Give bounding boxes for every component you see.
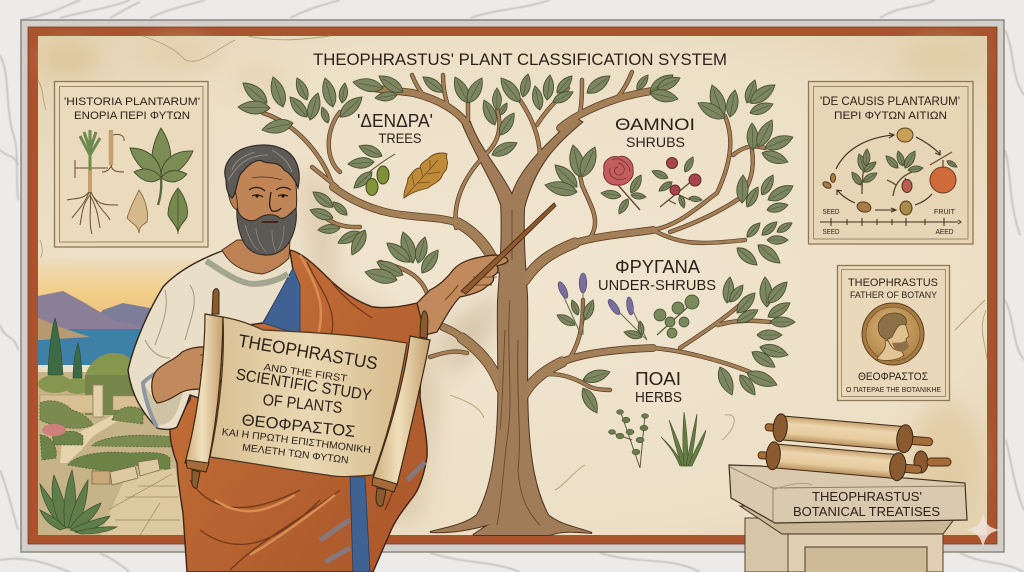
scroll text: SCIENTIFIC STUDY <box>235 366 373 405</box>
icon: rooted plant <box>67 130 124 234</box>
cloak folds and highlights <box>190 255 415 570</box>
beard <box>237 208 296 255</box>
label: under-shrubs <box>598 257 716 294</box>
label: shrubs: ΘΑΜΝΟΙ <box>615 115 695 134</box>
head <box>225 145 299 255</box>
label: trees <box>357 111 433 146</box>
caption <box>848 277 938 300</box>
left roller <box>185 289 223 488</box>
pedestal column <box>745 518 943 572</box>
caption: THEOPHRASTUS <box>848 277 938 289</box>
garden stones <box>92 459 160 485</box>
icon: grass tuft <box>661 412 706 466</box>
icon: oak leaf <box>404 153 448 198</box>
cloak borders <box>320 462 425 562</box>
label: trees: 'ΔΕΝΔΡΑ' <box>357 111 433 131</box>
icon: parsley leaf <box>654 295 699 338</box>
caption: FATHER OF BOTANY <box>850 290 937 300</box>
label: trees: TREES <box>378 130 422 146</box>
label: shrubs <box>615 115 695 150</box>
pedestal label: BOTANICAL TREATISES <box>793 504 940 519</box>
pedestal label: THEOPHRASTUS' <box>812 489 922 504</box>
scroll text: ΚΑΙ Η ΠΡΩΤΗ ΕΠΙΣΤΗΜΟΝΙΚΗ <box>221 427 371 456</box>
blue sash <box>263 268 370 572</box>
panel: Historia Plantarum <box>54 82 208 247</box>
timeline: SEED <box>822 227 840 236</box>
pointer rod <box>461 203 556 294</box>
panel title <box>820 96 960 122</box>
collar <box>206 261 288 284</box>
leaves <box>238 70 796 416</box>
sleeve fold lines <box>145 285 194 358</box>
pedestal with treatises <box>729 413 967 572</box>
forearm and left hand <box>152 347 224 403</box>
label: herbs <box>635 369 682 406</box>
label: herbs: HERBS <box>635 389 682 406</box>
panel title <box>64 96 200 122</box>
rolled scrolls <box>757 413 951 483</box>
icon: rose <box>600 156 646 216</box>
icon: bronze medal portrait <box>862 303 924 365</box>
icon: bramble <box>651 155 702 209</box>
cloak <box>170 250 428 572</box>
growth cycle arrows <box>836 133 940 212</box>
hair <box>225 145 299 198</box>
tunic and sleeve <box>128 250 293 429</box>
icon: palmate leaf <box>130 128 193 205</box>
icon: thyme <box>608 410 648 468</box>
panel title: 'DE CAUSIS PLANTARUM' <box>820 96 960 108</box>
panel title: ΠΕΡΙ ΦΥΤΩΝ ΑΙΤΙΩΝ <box>834 110 947 122</box>
greek caption <box>846 371 941 394</box>
seeds and fruit <box>822 128 958 215</box>
scroll text: AND THE FIRST <box>263 362 348 385</box>
scroll text: OF PLANTS <box>262 392 343 417</box>
cypress trees <box>48 318 82 378</box>
classification tree <box>238 70 796 535</box>
panel: De Causis Plantarum <box>808 82 973 244</box>
parchment sheet <box>210 317 407 477</box>
mountains <box>38 291 150 329</box>
panel: father of botany medallion <box>838 266 950 400</box>
figure of Theophrastus <box>128 145 556 572</box>
timeline: SEED <box>822 207 840 216</box>
sleeve inner shadow and cuff <box>143 365 183 427</box>
panel title: ΕΝΟΡΙΑ ΠΕΡΙ ΦΥΤΩΝ <box>74 110 190 122</box>
scroll text: ΜΕΛΕΤΗ ΤΩΝ ΦΥΤΩΝ <box>242 443 349 466</box>
trunk and branches <box>263 72 770 535</box>
greek caption: Ο ΠΑΤΕΡΑΕ ΤΗΕ ΒΟΤΑΝΙΚΗΕ <box>846 385 941 394</box>
title: THEOPHRASTUS' PLANT CLASSIFICATION SYSTEM <box>313 51 727 69</box>
ear <box>228 188 238 210</box>
neck <box>222 240 290 274</box>
timeline: AEED <box>936 227 954 236</box>
face features <box>249 177 291 211</box>
soft shadow behind figure <box>300 170 500 520</box>
label: shrubs: SHRUBS <box>626 134 685 150</box>
agave plant <box>40 470 117 534</box>
sparkle mark <box>966 513 1000 548</box>
scroll text <box>221 331 379 466</box>
greek caption: ΘΕΟΦΡΑΣΤΟΣ <box>858 371 928 383</box>
icon: olive sprig <box>348 141 395 196</box>
timeline: FRUIT <box>934 207 955 216</box>
timeline <box>820 207 961 236</box>
main scroll <box>185 289 430 506</box>
label: herbs: ΠΟΑΙ <box>635 369 681 389</box>
icon: dried leaf <box>127 190 148 233</box>
right arm and hand <box>417 255 508 335</box>
landscape: garden and sea <box>38 258 198 537</box>
scroll text: THEOPHRASTUS <box>237 331 379 374</box>
panel title: 'HISTORIA PLANTARUM' <box>64 96 200 108</box>
label: under-shrubs: UNDER-SHRUBS <box>598 277 716 294</box>
icon: green leaf <box>168 188 188 234</box>
fruiting sapling <box>884 149 923 196</box>
scroll text: ΘΕΟΦΡΑΣΤΟΣ <box>241 412 356 441</box>
icon: lavender sprigs <box>555 273 647 341</box>
right roller <box>372 311 430 506</box>
pedestal label <box>793 489 940 519</box>
label: under-shrubs: ΦΡΥΓΑΝΑ <box>615 257 700 277</box>
seedling <box>849 149 879 194</box>
